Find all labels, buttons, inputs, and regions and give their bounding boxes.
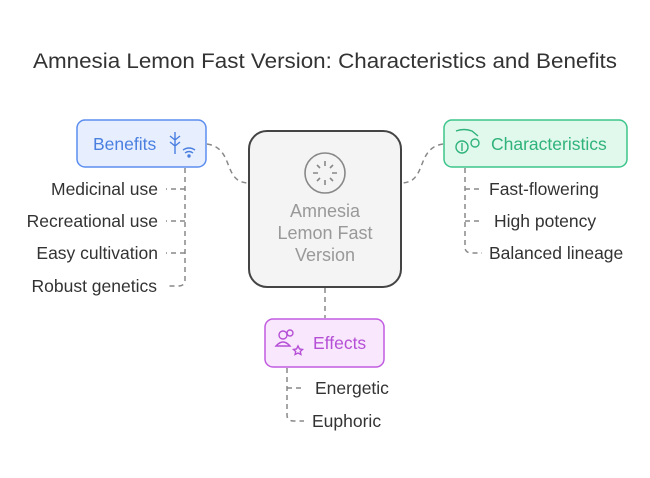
icon: wheat wifi [170,132,195,157]
effects list: Energetic [315,378,389,398]
characteristics list [489,179,623,263]
title: Amnesia Lemon Fast Version: Characteristics and Benefits [33,50,617,73]
panel: characteristics header [444,120,627,167]
panel: center [249,131,401,287]
icon: plant seed [456,130,479,153]
effects list [312,378,389,431]
benefits list: Easy cultivation [36,243,158,263]
panel: benefits header: Benefits [93,134,156,154]
characteristics list: Fast-flowering [489,179,599,199]
panel: benefits header [77,120,206,167]
panel: effects header: Effects [313,333,366,353]
characteristics list: High potency [494,211,596,231]
panel: center: Lemon Fast [277,223,373,243]
benefits list: Medicinal use [51,179,158,199]
panel: center: Amnesia [290,201,361,221]
benefits list: Robust genetics [32,276,157,296]
benefits list [27,179,158,296]
icon: people star [276,330,302,354]
characteristics list: Balanced lineage [489,243,623,263]
effects list: Euphoric [312,411,381,431]
icon: lemon slice [305,153,345,193]
panel: characteristics header: Characteristics [491,134,607,154]
benefits list: Recreational use [27,211,158,231]
panel: center: Version [295,245,355,265]
panel: effects header [265,319,384,367]
